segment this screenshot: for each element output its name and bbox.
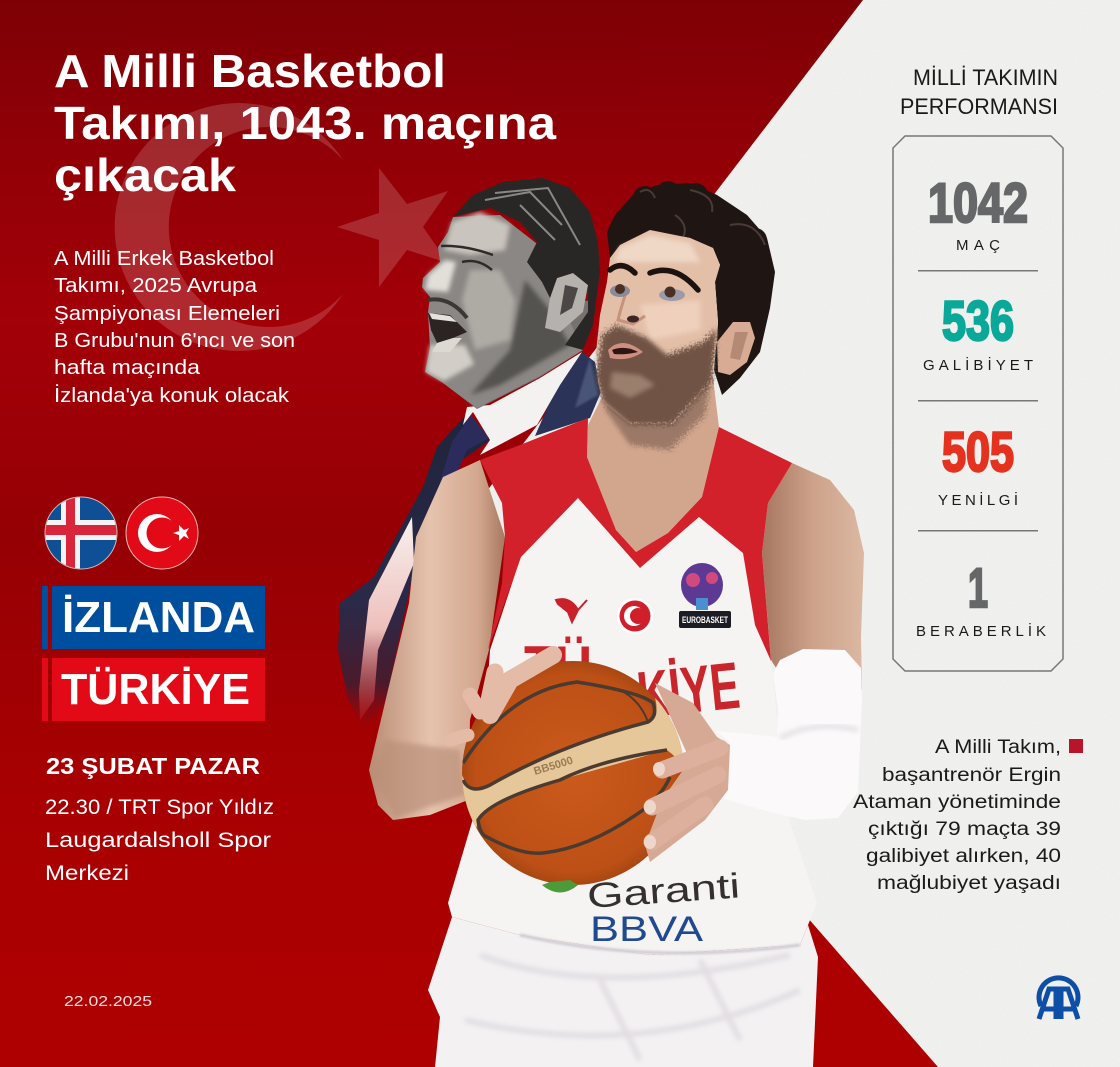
player eyes and brows: [610, 266, 698, 301]
title: A Milli Basketbol: [54, 45, 446, 97]
coach tie: [440, 415, 489, 482]
coach record text: galibiyet alırken, 40: [866, 846, 1061, 867]
icon: Iceland flag: [45, 497, 117, 569]
player mouth: [608, 343, 643, 359]
title: [54, 45, 556, 201]
player neck and chest: [587, 370, 719, 552]
player beard: [596, 325, 717, 425]
jersey team wordmark: TÜ: [524, 634, 592, 701]
jersey leaf mark: [542, 880, 578, 892]
coach mouth: [428, 313, 467, 343]
coach collar: [463, 352, 582, 455]
jersey BBVA logo: BBVA: [590, 910, 704, 949]
team bar: Türkiye: TÜRKİYE: [61, 665, 250, 714]
stat: losses: [938, 420, 1018, 509]
divider: [918, 530, 1038, 532]
performance heading: PERFORMANSI: [900, 94, 1058, 119]
coach jacket left: [338, 417, 490, 730]
divider: [918, 270, 1038, 272]
stat: matches: 1042: [928, 171, 1028, 234]
stat: draws: BERABERLİK: [916, 622, 1046, 640]
intro text: hafta maçında: [54, 357, 201, 379]
coach record text: çıktığı 79 maçta 39: [868, 819, 1061, 840]
coach record text: A Milli Takım,: [935, 737, 1061, 758]
intro text: B Grubu'nun 6'ncı ve son: [54, 330, 295, 352]
jersey EuroBasket logo: [679, 563, 731, 628]
jersey EuroBasket logo: EUROBASKET: [682, 615, 728, 625]
player left arm: [369, 460, 505, 820]
stat: draws: [916, 556, 1046, 640]
basketball: BB5000: [532, 755, 574, 778]
player nose: [618, 292, 645, 324]
match details: 22.30 / TRT Spor Yıldız: [45, 796, 274, 819]
intro text: Şampiyonası Elemeleri: [54, 303, 280, 325]
stat: wins: 536: [942, 289, 1014, 352]
performance heading: MİLLİ TAKIMIN: [913, 65, 1058, 90]
publish date: 22.02.2025: [64, 993, 152, 1010]
photo: coach Ergin Ataman: [338, 178, 601, 730]
intro text: Takımı, 2025 Avrupa: [54, 275, 258, 297]
player hair: [607, 181, 775, 395]
jersey Garanti logo: Garanti: [586, 866, 741, 916]
intro text: İzlanda'ya konuk olacak: [54, 384, 290, 407]
player right hand: [644, 683, 730, 862]
icon: Turkey flag: [126, 497, 198, 569]
coach shading: [425, 212, 570, 395]
jersey Turkish emblem: [617, 598, 653, 634]
stat: matches: MAÇ: [956, 237, 1000, 254]
jersey team wordmark: KİYE: [634, 648, 743, 732]
intro text: [54, 248, 295, 407]
player jersey red panels: [480, 418, 792, 661]
title: çıkacak: [54, 149, 236, 201]
panel: performance stats: [893, 136, 1063, 671]
player ear: [717, 322, 755, 375]
stat: wins: GALİBİYET: [923, 356, 1033, 374]
stat: losses: YENİLGİ: [938, 491, 1018, 509]
player jersey white: [448, 498, 817, 955]
coach jacket right: [535, 352, 601, 436]
background: white paper panel: [480, 0, 1120, 1067]
basketball: [462, 661, 686, 885]
coach neck: [443, 300, 590, 409]
coach ear: [545, 273, 588, 332]
player right arm: [762, 463, 864, 690]
intro text: A Milli Erkek Basketbol: [54, 248, 274, 270]
coach record text: [853, 737, 1061, 894]
divider: [918, 400, 1038, 402]
team bar: Türkiye: [42, 658, 265, 721]
match details: [45, 796, 274, 885]
player face: [596, 230, 720, 424]
player left hand: [450, 655, 553, 740]
coach moustache: [428, 299, 467, 318]
stat: matches: [928, 171, 1028, 254]
coach record text: mağlubiyet yaşadı: [877, 873, 1061, 894]
coach brow and eye: [441, 246, 493, 270]
jersey team wordmark: [524, 634, 743, 732]
match date: 23 ŞUBAT PAZAR: [46, 753, 260, 779]
player sleeve: [716, 649, 862, 820]
player shorts: [428, 917, 818, 1067]
coach face: [422, 215, 583, 408]
stat: losses: 505: [942, 420, 1014, 483]
icon: AA logo: [1039, 978, 1078, 1019]
jersey Puma logo: [556, 599, 587, 622]
performance heading: [900, 65, 1058, 119]
title: Takımı, 1043. maçına: [54, 97, 556, 149]
match details: Merkezi: [45, 862, 129, 885]
stat: wins: [923, 289, 1033, 374]
match details: Laugardalsholl Spor: [45, 829, 271, 852]
photo: player Furkan: [369, 181, 864, 1067]
coach record text: başantrenör Ergin: [882, 765, 1061, 786]
marker: red square: [1069, 739, 1083, 753]
coach record text: Ataman yönetiminde: [853, 792, 1061, 813]
team bar: İzlanda: [42, 586, 265, 649]
stat: draws: 1: [968, 556, 988, 619]
coach shirt strip: [359, 517, 414, 720]
background: flag crescent and star: [115, 103, 448, 351]
coach hair: [453, 178, 600, 350]
team bar: İzlanda: İZLANDA: [62, 593, 255, 642]
